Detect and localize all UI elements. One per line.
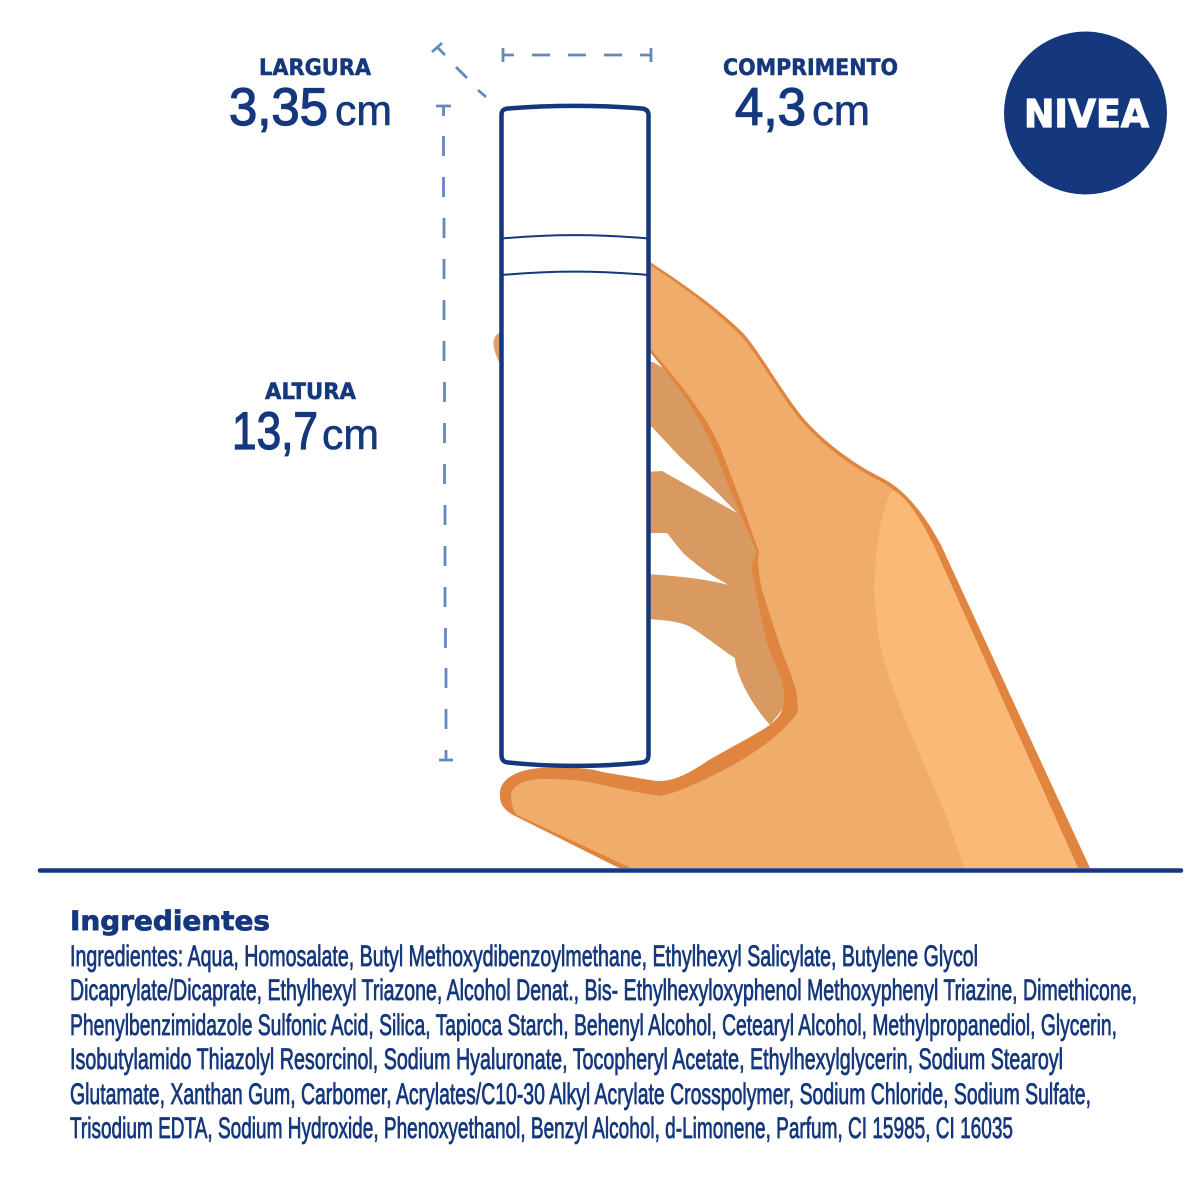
logo: NIVEA badge	[1004, 32, 1167, 194]
label: comprimento measurement	[723, 55, 898, 137]
arrow: height dimension	[436, 106, 453, 760]
hand: light side	[874, 490, 1078, 868]
illustration: hand holding product	[493, 259, 1090, 868]
hand: far fingers	[645, 362, 790, 725]
heading: ingredientes: Ingredientes	[70, 906, 270, 937]
label: altura measurement: 13,7	[232, 402, 318, 461]
label: altura measurement	[232, 379, 379, 461]
label: largura measurement: 3,35	[229, 78, 328, 137]
hand: outline silhouette	[500, 259, 1090, 868]
product: bottle outline	[502, 106, 648, 766]
text block: ingredient list	[70, 940, 1137, 1145]
label: comprimento measurement: COMPRIMENTO	[723, 55, 898, 81]
label: altura measurement: cm	[322, 411, 379, 459]
arrow: depth dimension	[432, 43, 486, 97]
label: comprimento measurement: 4,3	[735, 78, 806, 137]
logo: NIVEA badge: NIVEA	[1024, 92, 1149, 137]
divider: ground line	[40, 868, 1181, 873]
label: altura measurement: ALTURA	[265, 379, 357, 405]
label: largura measurement	[229, 55, 392, 137]
hand: fingertip behind product	[493, 332, 502, 364]
arrow: width dimension	[503, 48, 651, 62]
label: largura measurement: cm	[335, 87, 392, 135]
label: comprimento measurement: cm	[812, 87, 870, 135]
label: largura measurement: LARGURA	[259, 55, 372, 81]
hand: skin	[511, 265, 1078, 868]
